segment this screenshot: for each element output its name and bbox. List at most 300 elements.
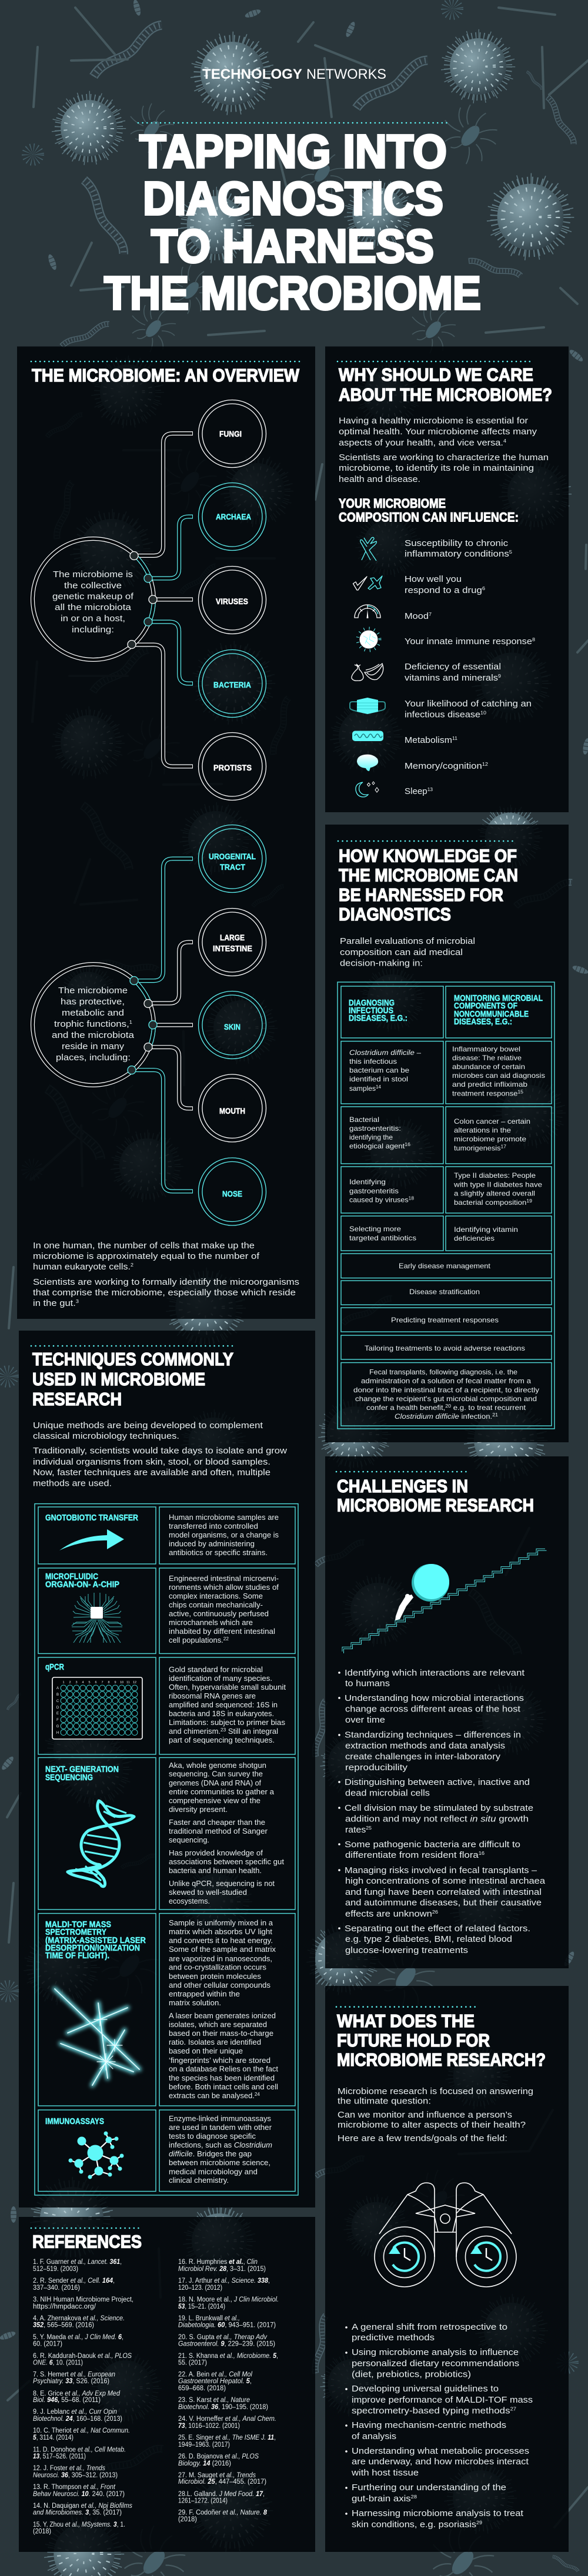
references: column 2: Microbiol Rev. 28, 3–31. (2015) (178, 2266, 266, 2273)
row: microfluidic organ-on-a-chip: Engineered intestinal microenvi- (169, 1575, 279, 1583)
references: column 1: 512–519. (2003) (33, 2266, 78, 2273)
references: column 1: 13, 517–526. (2011) (33, 2453, 86, 2460)
cell: Clostridium difficile: Clostridium difficile – (349, 1049, 421, 1057)
item: infectious disease: 10 (480, 710, 487, 716)
row: microfluidic organ-on-a-chip: 22 (223, 1636, 229, 1642)
row: microfluidic organ-on-a-chip: ronments which allow studies of (169, 1583, 279, 1592)
row: MALDI-TOF mass spectrometry: DESORPTION/IONIZATION (45, 1944, 140, 1953)
row: fecal transplants: 20 (445, 1403, 452, 1409)
text: diagnostics introduction: Parallel evaluations of microbial (340, 937, 475, 946)
row: disease stratification: Disease stratification (409, 1288, 480, 1296)
references: column 2: Microbiol. 25, 447–455. (2017) (178, 2478, 266, 2485)
node: bacteria (199, 650, 266, 717)
text: techniques introduction: Traditionally, scientists would take days to isolate and grow (33, 1446, 288, 1456)
illustration: figure pushing boulder up stairs (342, 1549, 547, 1653)
row: microfluidic organ-on-a-chip (38, 1568, 295, 1654)
row: qPCR: bacteria and 18S in eukaryotes. (169, 1710, 274, 1718)
divider: title dotted rule (138, 122, 447, 123)
text: why introduction: aspects of your health, and vice versa. (339, 438, 484, 448)
references: column 2: 27. M. Sauget et al., Trends (178, 2472, 256, 2479)
icon: well plate: 6 (95, 1681, 97, 1684)
references: column 2: 21. S. Khanna et al., Microbiome. 5, (178, 2353, 278, 2360)
text: techniques introduction: individual organisms from skin, stool, or blood samples. (33, 1458, 270, 1467)
row: next-generation sequencing: sequencing. (169, 1836, 209, 1844)
row: next-generation sequencing: comprehensive view of the (169, 1797, 260, 1805)
cell: bacterial gastroenteritis: gastroenteritis: (349, 1124, 401, 1133)
cell: targeted antibiotics: Selecting more (349, 1225, 401, 1233)
title: THE MICROBIOME (104, 267, 481, 319)
list: future trends: spectrometry-based typing methods (352, 2406, 487, 2416)
references: column 1: (2018) (33, 2528, 51, 2535)
node: viruses (199, 567, 266, 634)
title (104, 125, 481, 319)
icon: well plate: G (56, 1725, 59, 1729)
column head: monitoring microbial components: DISEASES, E.G.: (454, 1017, 512, 1027)
item: metabolism: 11 (452, 736, 458, 741)
list: future trends: are underway, and how microbes interact (352, 2457, 529, 2467)
text: microbiome functions: and the microbiota (52, 1031, 135, 1040)
heading: techniques: RESEARCH (32, 1389, 122, 1409)
text: future introduction: Can we monitor and influence a person’s (338, 2111, 512, 2120)
references: column 2: Diabetologia. 60, 943–951. (2017) (178, 2322, 276, 2329)
cell: Clostridium difficile: samples (349, 1084, 376, 1093)
text: future introduction: Here are a few trends/goals of the field: (338, 2134, 507, 2143)
icon: well plate: D (56, 1706, 59, 1710)
list: challenges: Standardizing techniques – differences in (345, 1731, 521, 1740)
references: column 2: 23. S. Karst et al., Nature (178, 2397, 250, 2404)
text: techniques introduction (33, 1421, 288, 1488)
row: fecal transplants (341, 1362, 552, 1426)
text: microbiome definition: The microbiome is (53, 570, 133, 579)
table: diagnostics (338, 982, 554, 1429)
subheading: composition can influence (339, 496, 519, 524)
heading: challenges (337, 1476, 534, 1515)
references: column 2: 22. A. Bein et al., Cell Mol (178, 2371, 252, 2379)
list: challenges: and autoimmune diseases, but their causative (345, 1898, 542, 1908)
references: column 1: 352, 565–569. (2016) (33, 2322, 94, 2329)
row: MALDI-TOF mass spectrometry: matrix solution. (169, 1999, 221, 2007)
row: qPCR: part of sequencing techniques. (169, 1736, 275, 1744)
icon: well plate: 2 (69, 1681, 71, 1684)
references: column 1: Neurosci. 36, 305–312. (2013) (33, 2472, 118, 2479)
row: MALDI-TOF mass spectrometry: between protein molecules (169, 1972, 261, 1981)
list: future trends: Using microbiome analysis to influence (352, 2348, 519, 2357)
references: column 2: Gastroenterol Hepatol. 5, (178, 2378, 252, 2385)
references: column 1: 2. R. Sender et al., Cell. 164, (33, 2277, 115, 2284)
row: immunoassays: medical microbiology and (169, 2168, 258, 2176)
row: MALDI-TOF mass spectrometry: (MATRIX-ASSISTED LASER (45, 1936, 146, 1945)
cell: type II diabetes: a slightly altered overall (454, 1190, 535, 1198)
references: column 1: ONE. 6, 10. (2011) (33, 2360, 83, 2367)
list: future trends: predictive methods (352, 2333, 435, 2343)
cell: type II diabetes (446, 1167, 552, 1213)
references: column 1: Biotechnol. 24, 160–168. (2013) (33, 2416, 122, 2423)
icon: well plate: 10 (120, 1681, 123, 1684)
text: overview closing paragraphs: microbiome is approximately equal to the number of (33, 1252, 260, 1261)
cell: inflammatory bowel disease: abundance of certain (452, 1063, 525, 1071)
references: column 1: https://hmpdacc.org/ (33, 2303, 96, 2310)
panel: references (19, 2217, 315, 2552)
references: column 1: Behav Neurosci. 10. 240. (2017) (33, 2491, 125, 2498)
row: fecal transplants: change the recipient's gut microbial composition and (355, 1395, 537, 1403)
item: vitamins and minerals: 9 (498, 674, 502, 679)
item: infectious disease (350, 698, 532, 719)
panel: techniques commonly used (19, 1331, 315, 2207)
panel: challenges in microbiome research (325, 1456, 569, 1968)
text: overview closing paragraphs: 2 (131, 1262, 134, 1268)
list: future trends: of analysis (352, 2432, 396, 2441)
item: sleep (356, 782, 433, 797)
heading: why should we care: WHY SHOULD WE CARE (339, 364, 533, 385)
row: MALDI-TOF mass spectrometry: ratio. Isolates are identified (169, 2038, 261, 2046)
cell: bacterial gastroenteritis: etiological agent (349, 1142, 400, 1150)
references: column 1 (33, 2259, 133, 2535)
list: challenges: addition and may not reflect in situ growth (345, 1815, 529, 1824)
list: challenges: Cell division may be stimulated by substrate (345, 1804, 533, 1813)
icon: well plate: 8 (108, 1681, 110, 1684)
references: column 2: 18. N. Moore et al., J Clin Microbiol. (178, 2296, 279, 2303)
row: qPCR: identification of many species. (169, 1674, 272, 1683)
row: next-generation sequencing: Has provided knowledge of (169, 1849, 263, 1857)
row: predicting treatment responses: Predicting treatment responses (391, 1316, 499, 1324)
heading: diagnostics: DIAGNOSTICS (339, 904, 451, 924)
row: fecal transplants: Fecal transplants, following diagnosis, i.e. the (369, 1368, 517, 1376)
icon: well plate: 12 (133, 1681, 136, 1684)
cell: inflammatory bowel disease: disease: The relative (452, 1054, 522, 1062)
list: challenges (338, 1669, 546, 1955)
node: archaea: ARCHAEA (216, 512, 251, 521)
heading: references: REFERENCES (32, 2231, 142, 2252)
node: bacteria: BACTERIA (213, 681, 251, 689)
text: overview closing paragraphs (33, 1241, 299, 1308)
item: innate immune response: Your innate immune response (405, 637, 517, 646)
text: future introduction: the ultimate question: (338, 2097, 431, 2106)
item: infectious disease: infectious disease (405, 710, 472, 719)
references: column 2: 120–123. (2012) (178, 2284, 222, 2292)
text: diagnostics introduction: decision-making in: (340, 959, 423, 969)
list: future trends: (diet, prebiotics, probiotics) (352, 2370, 471, 2379)
cell: inflammatory bowel disease: Inflammatory bowel (452, 1045, 520, 1053)
text: future introduction: microbiome to alter aspects of their health? (338, 2121, 526, 2130)
list: future trends: 27 (510, 2406, 517, 2412)
list: challenges: change across different areas of the host (345, 1705, 520, 1714)
text: microbiome functions: trophic functions, (54, 1020, 119, 1029)
references: column 1: 5, 3114. (2014) (33, 2434, 74, 2441)
title: TO HARNESS (151, 220, 434, 272)
text: overview closing paragraphs: Scientists are working to formally identify the microorganisms (33, 1278, 299, 1287)
row: tailoring treatments (341, 1335, 552, 1359)
references: column 2: 25. E. Singer et al., The ISME J. 11, (178, 2434, 276, 2441)
item: infectious disease: Your likelihood of catching an (405, 699, 532, 709)
row: fecal transplants: Clostridium difficile infection. (395, 1412, 489, 1421)
row: MALDI-TOF mass spectrometry: Some of the sample and matrix (169, 1945, 276, 1954)
item: mood: Mood (405, 612, 426, 621)
item: innate immune response (358, 628, 536, 651)
text: why introduction (339, 416, 549, 484)
row: MALDI-TOF mass spectrometry: and other cellular compounds (169, 1981, 270, 1989)
row: next-generation sequencing: sequencing. Can survey the (169, 1770, 263, 1778)
row: immunoassays: IMMUNOASSAYS (45, 2117, 104, 2126)
list: challenges: high concentrations of some intestinal archaea (345, 1877, 546, 1886)
references: column 1: 1. F. Guarner et al., Lancet. 361, (33, 2259, 122, 2266)
text: future introduction (338, 2087, 533, 2143)
icon: well plate: 7 (101, 1681, 103, 1684)
cell: bacterial gastroenteritis: Bacterial (349, 1116, 379, 1124)
row: qPCR (38, 1657, 295, 1754)
references: column 1: 14. N. Daquigan et al., Npj Biofilms (33, 2503, 132, 2510)
list: future trends: Having mechanism-centric methods (352, 2421, 506, 2430)
list: challenges: over time (345, 1716, 385, 1725)
row: microfluidic organ-on-a-chip: ORGAN-ON- A-CHIP (45, 1580, 119, 1589)
cell: Clostridium difficile: identified in stool (349, 1075, 408, 1083)
cell: colon cancer: alterations in the (454, 1126, 511, 1134)
list: challenges: 25 (366, 1825, 372, 1831)
heading: challenges: CHALLENGES IN (337, 1476, 468, 1496)
list: challenges: extraction methods and data analysis (345, 1741, 505, 1751)
table: techniques (35, 1504, 298, 2195)
text: diagnostics introduction (340, 937, 475, 969)
row: gnotobiotic transfer: Human microbiome samples are (169, 1513, 279, 1522)
heading: why should we care: ABOUT THE MICROBIOME? (339, 384, 552, 405)
heading: diagnostics: HOW KNOWLEDGE OF (339, 845, 517, 866)
row: MALDI-TOF mass spectrometry: entrapped within the (169, 1990, 240, 1998)
row: next-generation sequencing: ecosystems. (169, 1897, 210, 1905)
heading: future: WHAT DOES THE (337, 2011, 475, 2031)
row: next-generation sequencing (38, 1757, 295, 1910)
list: future trends: Furthering our understanding of the (352, 2483, 506, 2493)
references: column 1: 4. A. Zhernakova et al., Science. (33, 2315, 125, 2322)
row: immunoassays: tests to diagnose specific (169, 2132, 256, 2140)
row: qPCR: 23 (220, 1727, 226, 1733)
row: tailoring treatments: Tailoring treatments to avoid adverse reactions (365, 1344, 525, 1352)
cell: colon cancer: tumorigenesis (454, 1144, 498, 1152)
row: MALDI-TOF mass spectrometry: matrix which absorbs UV light (169, 1928, 273, 1936)
column head: diagnosing infectious diseases: INFECTIOUS (349, 1006, 393, 1016)
row: MALDI-TOF mass spectrometry: the species has been identified (169, 2074, 275, 2082)
list: challenges: Managing risks involved in fecal transplants – (345, 1866, 537, 1875)
heading: why should we care (339, 364, 552, 405)
references: column 1: 60. (2017) (33, 2340, 62, 2347)
node: protists: PROTISTS (213, 763, 252, 772)
icon: laser star bursts (55, 1989, 139, 2085)
references: column 1: 12. J. Foster et al., Trends (33, 2465, 105, 2472)
list: challenges: glucose-lowering treatments (345, 1946, 468, 1955)
text: microbiome definition: in or on a host, (61, 614, 125, 624)
row: MALDI-TOF mass spectrometry: MALDI-TOF MASS (45, 1920, 111, 1930)
row: early disease management (341, 1254, 552, 1278)
references: column 1: 9. J. Leblanc et al., Curr Opin (33, 2408, 117, 2416)
cell: colon cancer: Colon cancer – certain (454, 1117, 530, 1125)
column head: diagnosing infectious diseases: DISEASES, E.G.: (349, 1014, 407, 1023)
list: challenges: reproducibility (345, 1763, 408, 1773)
row: MALDI-TOF mass spectrometry: before. Both intact cells and cell (169, 2083, 278, 2091)
list: challenges: Separating out the effect of related factors. (345, 1924, 530, 1934)
text: techniques introduction: Unique methods are being developed to complement (33, 1421, 263, 1431)
list: challenges: create challenges in inter-laboratory (345, 1753, 501, 1762)
row: immunoassays: between microbiome science, (169, 2159, 270, 2167)
icon: molecule (68, 2131, 123, 2179)
list: challenges: 26 (432, 1910, 439, 1915)
row: immunoassays: Enzyme-linked immunoassays (169, 2115, 271, 2123)
text: techniques introduction: classical microbiology techniques. (33, 1432, 179, 1441)
references: column 1: 5. Y. Maeda et al., J Clin Med. 6, (33, 2334, 123, 2341)
references: column 1: Psychiatry. 33, S26. (2016) (33, 2378, 109, 2385)
node: skin (199, 991, 266, 1059)
references: column 2: (2018) (178, 2516, 197, 2523)
row: MALDI-TOF mass spectrometry: ‘fingerprints’ which are stored (169, 2056, 270, 2065)
list: challenges: Distinguishing between active, inactive and (345, 1778, 530, 1787)
icon: arrow (59, 1529, 124, 1550)
list: challenges: Identifying which interactions are relevant (345, 1669, 524, 1678)
icon: well plate (52, 1677, 142, 1739)
icon: well plate: 1 (62, 1681, 65, 1684)
text: microbiome functions (52, 986, 135, 1063)
list: future trends: Developing universal guidelines to (352, 2384, 499, 2394)
item: drug response: 6 (482, 586, 486, 591)
row: next-generation sequencing: Faster and cheaper than the (169, 1818, 265, 1827)
heading: future (337, 2011, 546, 2070)
row: MALDI-TOF mass spectrometry: 24 (255, 2092, 260, 2097)
row: MALDI-TOF mass spectrometry: based on their mass-to-charge (169, 2029, 273, 2038)
row: gnotobiotic transfer: transferred into controlled (169, 1522, 258, 1530)
cell: viral gastroenteritis: caused by viruses (349, 1196, 406, 1204)
row: next-generation sequencing: traditional method of Sanger (169, 1827, 268, 1835)
references: column 2: 73, 1016–1022. (2001) (178, 2423, 240, 2430)
row: next-generation sequencing: diversity present. (169, 1805, 228, 1814)
text: microbiome definition (52, 570, 134, 635)
references: column 1: 7. S. Hemert et al., European (33, 2371, 115, 2379)
heading: techniques (32, 1349, 233, 1409)
text: overview closing paragraphs: In one human, the number of cells that make up the (33, 1241, 255, 1251)
row: disease stratification (341, 1281, 552, 1305)
row: immunoassays (38, 2110, 295, 2191)
row: MALDI-TOF mass spectrometry: SPECTROMETRY (45, 1928, 106, 1937)
item: chronic inflammatory conditions: Susceptibility to chronic (405, 539, 508, 548)
row: early disease management: Early disease management (399, 1262, 491, 1270)
row: MALDI-TOF mass spectrometry: A laser beam generates ionized (169, 2012, 276, 2020)
row: fecal transplants: donor into the intestinal tract of a recipient, to directly (353, 1386, 539, 1394)
node: large intestine (199, 909, 266, 976)
item: chronic inflammatory conditions: inflammatory conditions (405, 550, 494, 559)
item: memory and cognition: Memory/cognition (405, 762, 472, 771)
row: next-generation sequencing: entire communities to gather a (169, 1788, 274, 1796)
subheading: composition can influence: COMPOSITION CAN INFLUENCE: (339, 510, 519, 524)
node: urogenital tract (199, 825, 266, 892)
row: microfluidic organ-on-a-chip: MICROFLUIDIC (45, 1572, 98, 1582)
item: drug response: respond to a drug (405, 586, 472, 595)
text: microbiome functions: places, including: (56, 1053, 131, 1063)
panel: why should we care (325, 347, 569, 812)
text: why introduction: Scientists are working to characterize the human (339, 453, 549, 463)
cell: inflammatory bowel disease: and predict infliximab (452, 1080, 527, 1088)
cell: Clostridium difficile: bacterium can be (349, 1066, 409, 1074)
row: microfluidic organ-on-a-chip: chips contain mechanically- (169, 1601, 263, 1609)
row: microfluidic organ-on-a-chip: microchannels which are (169, 1619, 253, 1627)
cell: viral gastroenteritis: Identifying (349, 1178, 386, 1186)
icon: well plate: 3 (75, 1681, 78, 1684)
references: column 2: 24. V. Horneffer et al., Anal Chem. (178, 2416, 276, 2423)
references: column 2: 659–668. (2018) (178, 2385, 226, 2392)
references: column 2: 1261–1272. (2014) (178, 2498, 228, 2505)
text: microbiome functions: The microbiome (58, 986, 128, 996)
item: drug response: How well you (405, 575, 462, 584)
item: metabolism: Metabolism (405, 736, 448, 745)
list: future trends: improve performance of MALDI-TOF mass (352, 2396, 533, 2405)
references: column 2 (178, 2259, 279, 2523)
cell: bacterial gastroenteritis: identifying the (349, 1133, 393, 1141)
column head: monitoring microbial components: COMPONENTS OF (454, 1001, 517, 1011)
row: MALDI-TOF mass spectrometry: based on their unique (169, 2047, 243, 2055)
heading: future: FUTURE HOLD FOR (337, 2030, 490, 2051)
icon: well plate: 9 (114, 1681, 116, 1684)
cell: bacterial gastroenteritis: 16 (405, 1142, 411, 1147)
row: qPCR: ribosomal RNA genes are (169, 1692, 256, 1700)
row: qPCR: Gold standard for microbial (169, 1666, 263, 1674)
row: next-generation sequencing: skewed to well-studied (169, 1888, 247, 1897)
row: gnotobiotic transfer: GNOTOBIOTIC TRANSFER (45, 1513, 138, 1523)
cell: type II diabetes: bacterial composition (454, 1198, 520, 1207)
references: column 2: Gastroenterol. 9, 229–239. (2015) (178, 2340, 275, 2347)
heading: challenges: MICROBIOME RESEARCH (337, 1495, 534, 1515)
item: innate immune response: 8 (532, 637, 536, 642)
cell: inflammatory bowel disease: 15 (517, 1090, 524, 1095)
row: MALDI-TOF mass spectrometry: extracts can be analysed. (169, 2092, 252, 2100)
panel: knowledge harnessed for diagnostics (325, 825, 569, 1442)
list: future trends (345, 2323, 533, 2530)
text: microbiome definition: including: (72, 625, 114, 635)
text: techniques introduction: Now, faster techniques are available and often, multiple (33, 1468, 270, 1478)
references: column 1: 337–340. (2016) (33, 2284, 80, 2292)
node: archaea (199, 483, 266, 550)
cell: inflammatory bowel disease (446, 1041, 552, 1104)
node: viruses: VIRUSES (216, 597, 248, 606)
column head: diagnosing infectious diseases (341, 986, 443, 1038)
row: qPCR: Still an integral (226, 1727, 278, 1736)
text: why introduction: Having a healthy microbiome is essential for (339, 416, 528, 426)
icon: well plate: 4 (82, 1681, 84, 1684)
references: column 2: 1949–1963. (2017) (178, 2441, 230, 2448)
text: why introduction: optimal health. Your microbiome affects many (339, 427, 537, 437)
text: why introduction: 4 (503, 438, 507, 444)
icon: circuit chip (72, 1593, 122, 1643)
logo: Technology Networks (202, 66, 386, 82)
item: chronic inflammatory conditions: 5 (509, 550, 513, 555)
text: why introduction: microbiome, to identify its role in maintaining (339, 464, 534, 473)
item: metabolism (352, 731, 458, 745)
text: overview closing paragraphs: 3 (76, 1299, 79, 1304)
references: column 2: 28.L. Galland. J Med Food. 17, (178, 2491, 265, 2498)
cell: Clostridium difficile (341, 1041, 443, 1104)
item: mood: 7 (429, 612, 432, 617)
row: next-generation sequencing: associations between specific gut (169, 1858, 285, 1866)
cell: inflammatory bowel disease: microbes can aid diagnosis (452, 1071, 545, 1080)
references: column 1: 6. R. Kaddurah-Daouk et al., PLOS (33, 2353, 132, 2360)
references: column 1: 10. C. Theriot et al., Nat Commun. (33, 2427, 130, 2434)
row: MALDI-TOF mass spectrometry: are vaporized in nanoseconds, (169, 1955, 272, 1963)
column head: diagnosing infectious diseases: DIAGNOSING (349, 999, 395, 1008)
list: future trends: A general shift from retrospective to (352, 2323, 507, 2332)
heading: diagnostics (339, 845, 518, 924)
row: immunoassays: are used in tandem with other (169, 2123, 272, 2132)
references: column 1: 11. D. Donohoe et al., Cell Metab. (33, 2446, 126, 2453)
item: mood (355, 605, 432, 621)
text: microbiome definition: all the microbiota (55, 603, 132, 612)
list: future trends: personalized dietary recommendations (352, 2359, 519, 2369)
row: microfluidic organ-on-a-chip: complex interactions. Some (169, 1592, 263, 1600)
node: fungi (199, 400, 266, 468)
item: sleep: 13 (427, 787, 433, 792)
references: column 1: and Microbiomes. 3, 35. (2017) (33, 2510, 122, 2517)
